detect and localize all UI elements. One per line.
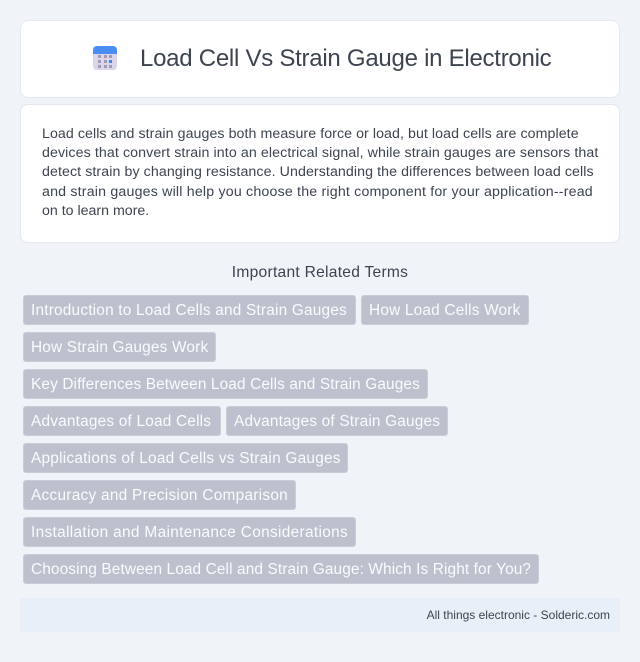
tag: Key Differences Between Load Cells and Strain Gauges [31,376,420,393]
tag: How Strain Gauges Work [31,339,208,356]
tag list: related terms [23,295,539,584]
tag: Introduction to Load Cells and Strain Gauges [31,302,347,319]
tag: Installation and Maintenance Considerations [31,524,348,541]
tag [23,332,216,362]
text block: introduction: detect strain by changing resistance. Understanding the differences between load cells [42,164,594,180]
tag: Accuracy and Precision Comparison [31,487,288,504]
text block: introduction [42,126,598,219]
tag: Advantages of Strain Gauges [234,413,440,430]
tag: Applications of Load Cells vs Strain Gauges [31,450,341,467]
title: Load Cell Vs Strain Gauge in Electronic [140,45,551,72]
panel: title header [20,20,620,98]
tag [23,406,221,436]
icon: calendar [93,46,117,70]
tag [23,480,296,510]
text block: introduction: devices that convert strain into an electrical signal, while strain gauges are sensors that [42,145,598,161]
tag [23,369,428,399]
tag [23,517,356,547]
text block: introduction: Load cells and strain gauges both measure force or load, but load cells are complete [42,126,579,142]
tag [226,406,448,436]
tag [23,443,348,473]
footer credit: All things electronic - Solderic.com [427,608,610,622]
footer [20,598,620,632]
text block: introduction: and strain gauges will help you choose the right component for your application--read [42,184,593,200]
tag: How Load Cells Work [369,302,520,319]
panel: introduction [20,104,620,243]
tag [361,295,529,325]
tag [23,554,539,584]
tag: Advantages of Load Cells [31,413,211,430]
heading: important related terms: Important Related Terms [232,264,408,281]
tag: Choosing Between Load Cell and Strain Gauge: Which Is Right for You? [31,561,531,578]
tag [23,295,356,325]
text block: introduction: on to learn more. [42,203,149,219]
